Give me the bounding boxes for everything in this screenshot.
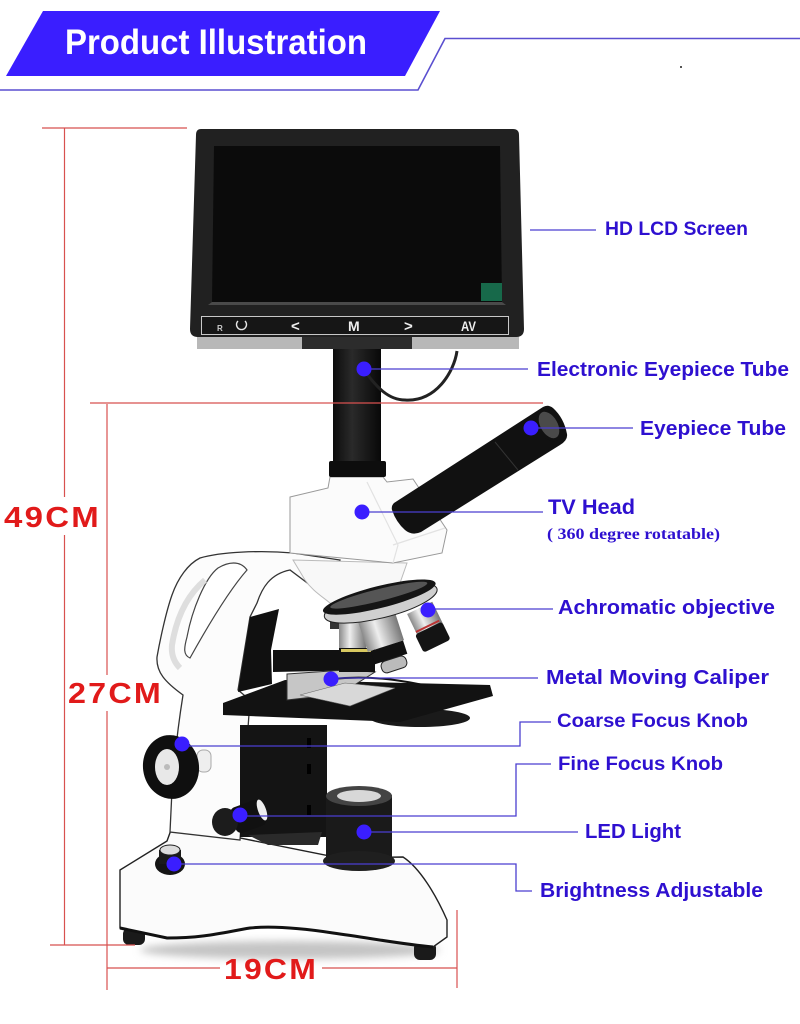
silver caliper bbox=[287, 670, 375, 700]
49 cm dimension bbox=[42, 128, 187, 945]
callout: LED Light: LED Light bbox=[585, 821, 681, 843]
slide holder bar bbox=[273, 650, 373, 672]
header banner bbox=[0, 11, 800, 90]
button bar: M bbox=[348, 318, 360, 334]
base bottom edge bbox=[120, 927, 433, 947]
base bbox=[120, 830, 447, 947]
button bar: > bbox=[404, 318, 413, 335]
column foot bbox=[248, 832, 322, 845]
feet bbox=[123, 928, 436, 960]
49CM label: 49CM bbox=[4, 502, 101, 534]
title ribbon bbox=[6, 11, 440, 76]
arm inner dark strip bbox=[238, 609, 279, 692]
19 cm dimension bbox=[107, 910, 457, 988]
eyepiece tube bbox=[392, 406, 567, 534]
callout: TV Head: ( 360 degree rotatable) bbox=[547, 526, 720, 543]
nosepiece bracket bbox=[330, 607, 342, 629]
column block bbox=[240, 725, 327, 837]
callout: Eyepiece Tube bbox=[524, 418, 786, 440]
centre objective bbox=[357, 608, 412, 677]
callout: Eyepiece Tube: Eyepiece Tube bbox=[640, 418, 786, 440]
27CM label: 27CM bbox=[68, 678, 163, 710]
right objective bbox=[405, 602, 451, 653]
eyepiece seam bbox=[495, 442, 518, 470]
callout: Electronic Eyepiece Tube: Electronic Eyepiece Tube bbox=[537, 359, 789, 381]
tube collar bbox=[329, 461, 386, 477]
nosepiece bbox=[320, 572, 441, 631]
power icon bbox=[237, 321, 246, 330]
arm and handle bbox=[157, 552, 340, 840]
callout: Achromatic objective bbox=[420, 597, 775, 619]
screen shadow bbox=[197, 334, 519, 349]
microscope bbox=[120, 345, 567, 960]
screen mount bbox=[302, 337, 412, 349]
brightness knob bbox=[155, 845, 185, 875]
speck bbox=[680, 66, 682, 68]
callout: HD LCD Screen: HD LCD Screen bbox=[605, 219, 748, 240]
cable bbox=[367, 351, 457, 400]
LED light bbox=[323, 786, 395, 871]
LCD screen bbox=[190, 129, 524, 349]
glass slide bbox=[300, 683, 395, 706]
callout: Metal Moving Caliper bbox=[324, 667, 769, 689]
handle opening bbox=[185, 563, 247, 658]
callout: Coarse Focus Knob bbox=[174, 711, 748, 752]
callout: LED Light bbox=[356, 821, 681, 843]
caliper dark arm bbox=[331, 678, 428, 686]
callout: Coarse Focus Knob: Coarse Focus Knob bbox=[557, 711, 748, 732]
column holes bbox=[307, 738, 311, 815]
header outline bbox=[0, 38, 800, 90]
19CM label: 19CM bbox=[224, 954, 318, 986]
cast shadow bbox=[140, 941, 440, 959]
button bar bbox=[202, 316, 508, 335]
trinocular tube bbox=[333, 345, 381, 467]
callout: TV Head bbox=[354, 496, 720, 543]
left objective bbox=[339, 620, 366, 652]
callout: Fine Focus Knob: Fine Focus Knob bbox=[558, 754, 723, 775]
stage bbox=[223, 680, 493, 722]
handle shading bbox=[172, 580, 205, 668]
head facet bbox=[367, 482, 445, 563]
focus ring bbox=[339, 648, 375, 672]
green patch bbox=[481, 283, 502, 301]
bezel bbox=[190, 129, 524, 337]
display bbox=[212, 146, 502, 302]
callout: Achromatic objective: Achromatic objective bbox=[558, 597, 775, 619]
callout: Metal Moving Caliper: Metal Moving Caliper bbox=[546, 667, 769, 689]
eyepiece lens bbox=[532, 406, 566, 444]
button bar: < bbox=[291, 318, 300, 335]
button bar: AV bbox=[461, 318, 477, 334]
coarse focus axle bbox=[197, 750, 211, 772]
button bar: R bbox=[217, 324, 223, 333]
27 cm dimension bbox=[90, 403, 543, 990]
fine focus knob bbox=[212, 798, 270, 836]
callout: Brightness Adjustable bbox=[166, 856, 763, 902]
coarse focus knob bbox=[139, 731, 203, 803]
head body bbox=[290, 477, 447, 563]
callout: Fine Focus Knob bbox=[232, 754, 723, 822]
turret collar bbox=[293, 560, 407, 605]
title: Product Illustration bbox=[65, 23, 367, 62]
callout: Brightness Adjustable: Brightness Adjustable bbox=[540, 880, 763, 902]
screen lower lip bbox=[208, 302, 506, 305]
callout: TV Head: TV Head bbox=[548, 496, 635, 519]
dimension lines bbox=[4, 128, 543, 990]
callout: Electronic Eyepiece Tube bbox=[356, 359, 789, 381]
under stage disc bbox=[370, 709, 470, 727]
